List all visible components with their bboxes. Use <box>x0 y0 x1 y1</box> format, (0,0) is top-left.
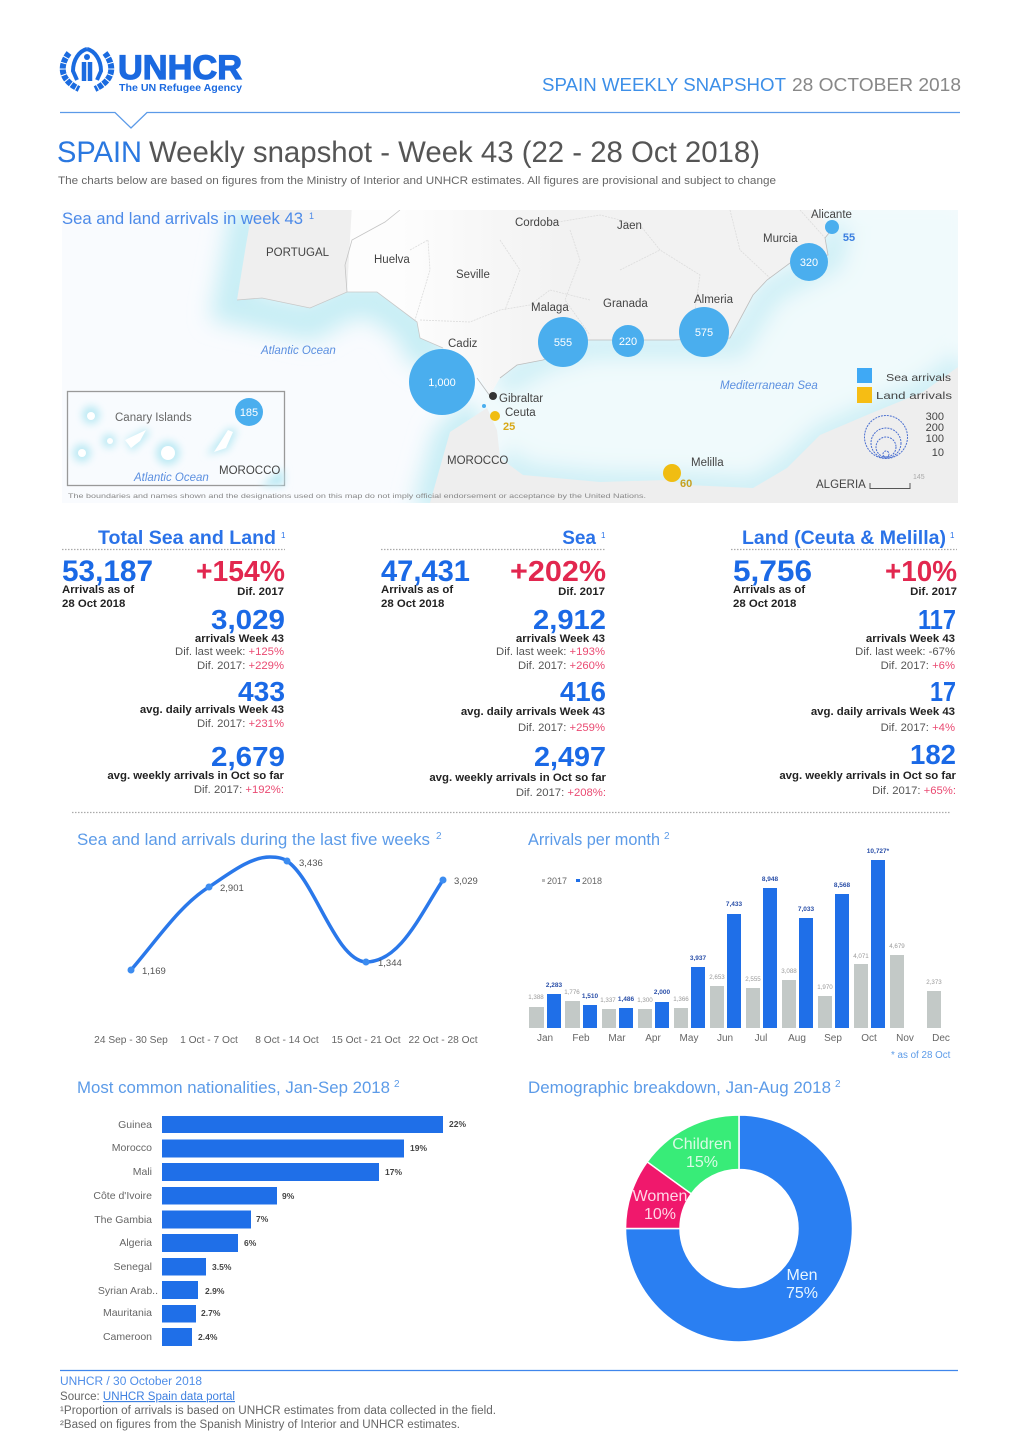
total difference: +202% <box>510 556 606 588</box>
circle values: 555 <box>554 337 572 349</box>
bars 2018 <box>547 860 885 1028</box>
country labels: Senegal <box>113 1261 152 1273</box>
map city labels: Seville <box>456 269 490 281</box>
total difference: +10% <box>885 556 957 588</box>
value labels 2017: 1,776 <box>564 989 580 996</box>
x axis labels: 1 Oct - 7 Oct <box>180 1035 238 1046</box>
value labels 2018: 10,727* <box>867 848 890 855</box>
dotted rule <box>62 548 285 550</box>
value labels 2017: 1,300 <box>637 997 653 1004</box>
map city labels: Gibraltar <box>499 393 543 405</box>
total label: 28 Oct 2018 <box>62 598 125 610</box>
value labels 2018: 2,000 <box>654 989 671 996</box>
circle values: 1,000 <box>428 377 456 389</box>
panel: land: Dif. 2017: +6% <box>881 660 955 672</box>
title: Weekly snapshot - Week 43 (22 - 28 Oct 2018) <box>149 136 760 169</box>
map sea labels <box>260 345 818 392</box>
panel: sea <box>381 528 607 799</box>
country labels: Guinea <box>118 1119 152 1131</box>
x axis labels <box>94 1035 478 1046</box>
month labels: Dec <box>932 1033 950 1044</box>
panel: sea: avg. daily arrivals Week 43 <box>461 706 605 718</box>
inset: Canary Islands <box>68 392 284 486</box>
value labels 2017: 3,088 <box>781 968 797 975</box>
footnote mark: 2 <box>394 1079 400 1090</box>
month labels <box>537 1033 950 1044</box>
map disclaimer: The boundaries and names shown and the designations used on this map do not imply official endorsement or acceptance by the United Nations. <box>68 494 646 500</box>
month labels: Jan <box>537 1033 553 1044</box>
circle values <box>428 232 855 389</box>
month labels: Oct <box>861 1033 877 1044</box>
value labels 2017: 1,388 <box>528 994 544 1001</box>
map legend: 100 <box>926 433 944 445</box>
panel: land: Dif. 2017: +65%: <box>872 785 956 797</box>
footnote 1: ¹Proportion of arrivals is based on UNHCR estimates from data collected in the field. <box>60 1405 496 1417</box>
chart title: Most common nationalities, Jan-Sep 2018 <box>77 1079 390 1097</box>
daily arrivals: 433 <box>238 676 285 707</box>
map city labels: Huelva <box>374 254 410 266</box>
panel: total sea and land: Dif. 2017: +229% <box>197 660 284 672</box>
land: Spain <box>347 205 833 395</box>
total figure: 47,431 <box>381 555 470 588</box>
label: men: 75% <box>786 1285 818 1302</box>
month labels: Feb <box>572 1033 590 1044</box>
label: children: 15% <box>686 1154 718 1171</box>
value labels 2018: 3,937 <box>690 955 707 962</box>
value labels 2018: 8,948 <box>762 876 779 883</box>
inset labels: Canary Islands <box>115 412 192 424</box>
country labels: Mali <box>133 1166 152 1178</box>
legend: 2018 <box>582 876 602 886</box>
inset: Canary Islands: MOROCCO <box>219 465 280 477</box>
map city labels: Jaen <box>617 220 642 232</box>
trend line <box>131 857 443 970</box>
data labels: 2,901 <box>220 883 244 894</box>
month labels: Jul <box>755 1033 767 1044</box>
chart title: Arrivals per month <box>528 831 660 849</box>
panel: sea: Dif. last week: +193% <box>496 646 605 658</box>
total label: 28 Oct 2018 <box>381 598 444 610</box>
panel: total sea and land: Dif. 2017: +231% <box>197 718 284 730</box>
label: men: Men <box>786 1267 818 1284</box>
panel: total sea and land: avg. weekly arrivals in Oct so far <box>107 770 285 782</box>
month labels: Jun <box>717 1033 733 1044</box>
logo tagline: The UN Refugee Agency <box>119 82 242 94</box>
icon: UNHCR emblem <box>63 49 111 89</box>
panel: land: avg. weekly arrivals in Oct so far <box>779 770 957 782</box>
footnote mark: 1 <box>281 531 286 540</box>
map city labels <box>266 209 866 491</box>
value labels 2017: 4,679 <box>889 943 905 950</box>
heading: Sea <box>562 528 596 549</box>
dotted rule <box>731 548 957 550</box>
country labels: Côte d'Ivoire <box>93 1190 152 1202</box>
weekly arrivals: 2,912 <box>533 604 606 635</box>
footer date: UNHCR / 30 October 2018 <box>60 1376 202 1388</box>
data labels: 3,436 <box>299 858 323 869</box>
map city labels: Alicante <box>811 209 852 221</box>
month labels: May <box>680 1033 698 1044</box>
value labels 2018: 7,433 <box>726 901 743 908</box>
chart title: Demographic breakdown, Jan-Aug 2018 <box>528 1079 831 1097</box>
data labels: 3,029 <box>454 876 478 887</box>
value labels: 3.5% <box>212 1262 232 1272</box>
chart note: * as of 28 Oct <box>891 1050 951 1061</box>
value labels 2017: 1,337 <box>600 997 616 1004</box>
panel: total sea and land: avg. daily arrivals Week 43 <box>140 704 284 716</box>
panel: land: Dif. last week: -67% <box>855 646 955 658</box>
label: women: Women <box>633 1188 687 1205</box>
map city labels: MOROCCO <box>447 455 508 467</box>
subtitle: The charts below are based on figures from the Ministry of Interior and UNHCR estimates. All figures are provisional and subject to change <box>58 175 776 187</box>
dotted rule <box>381 548 606 550</box>
panel: land: Dif. 2017: +4% <box>881 722 955 734</box>
panel: total sea and land: Dif. last week: +125% <box>175 646 284 658</box>
map city labels: PORTUGAL <box>266 247 330 259</box>
month labels: Nov <box>896 1033 914 1044</box>
heading: Total Sea and Land <box>98 528 276 549</box>
total figure: 53,187 <box>62 555 153 588</box>
inset island glow <box>73 406 284 486</box>
data points <box>128 858 446 974</box>
value labels 2017: 1,970 <box>817 984 833 991</box>
map city labels: Cadiz <box>448 338 478 350</box>
total figure: 5,756 <box>733 555 812 588</box>
map city labels: ALGERIA <box>816 479 866 491</box>
panel: land: arrivals Week 43 <box>866 633 955 645</box>
title: SPAIN <box>57 136 142 169</box>
country labels: The Gambia <box>94 1214 152 1226</box>
panel: land <box>731 528 957 797</box>
map sea labels: Atlantic Ocean <box>260 345 336 357</box>
segment: men <box>626 1115 852 1342</box>
label: children: Children <box>672 1136 732 1153</box>
map city labels: Almeria <box>694 294 734 306</box>
map scale bar: 145 <box>913 474 925 481</box>
segment: children <box>647 1115 739 1194</box>
country labels: Morocco <box>112 1142 152 1154</box>
panel: total sea and land: Dif. 2017 <box>237 586 284 598</box>
panel: sea: Dif. 2017: +259% <box>518 722 605 734</box>
panel: land: Dif. 2017 <box>910 586 957 598</box>
legend: 2017 <box>547 876 567 886</box>
value labels: 2.7% <box>201 1308 221 1318</box>
segment: women <box>626 1162 691 1228</box>
panel: demographic breakdown donut <box>528 1079 852 1342</box>
x axis labels: 8 Oct - 14 Oct <box>255 1035 319 1046</box>
markers: land arrivals: 60 <box>680 478 692 490</box>
value labels 2018 <box>546 848 890 1003</box>
footnote 2: ²Based on figures from the Spanish Ministry of Interior and UNHCR estimates. <box>60 1419 460 1431</box>
weekly arrivals: 3,029 <box>211 604 285 635</box>
value labels <box>198 1119 466 1342</box>
map background <box>196 210 958 503</box>
panel: arrivals per month <box>528 831 951 1061</box>
panel: line chart of last five weeks <box>77 831 478 1046</box>
map legend: 10 <box>932 447 944 459</box>
x axis labels: 22 Oct - 28 Oct <box>408 1035 478 1046</box>
country labels <box>93 1119 158 1343</box>
land: Portugal <box>237 205 352 308</box>
footnote mark: 2 <box>835 1079 841 1090</box>
circle values: 575 <box>695 327 713 339</box>
value labels: 7% <box>256 1214 269 1224</box>
value labels 2018: 1,486 <box>618 996 635 1003</box>
total label: Arrivals as of <box>733 584 805 596</box>
panel: total sea and land: Dif. 2017: +192%: <box>194 784 284 796</box>
weekly arrivals: 117 <box>918 604 956 635</box>
value labels: 9% <box>282 1191 295 1201</box>
map sea labels: Mediterranean Sea <box>720 380 818 392</box>
inset frame <box>68 392 284 486</box>
icon: Gibraltar marker <box>489 392 497 400</box>
value labels 2017: 1,366 <box>673 996 689 1003</box>
land: Morocco and Algeria <box>428 362 965 510</box>
value labels 2018: 1,510 <box>582 993 599 1000</box>
value labels 2018: 8,568 <box>834 882 851 889</box>
month labels: Apr <box>645 1033 661 1044</box>
label: women: 10% <box>644 1206 676 1223</box>
value labels: 22% <box>449 1119 466 1129</box>
markers: land arrivals: 25 <box>503 421 515 433</box>
inset: Canary Islands: Atlantic Ocean <box>133 472 209 484</box>
map city labels: Granada <box>603 298 648 310</box>
value labels 2017: 2,555 <box>745 976 761 983</box>
markers: land arrivals <box>490 411 692 490</box>
logo: UNHCR <box>63 49 242 94</box>
map title: Sea and land arrivals in week 43 <box>62 210 303 228</box>
data labels <box>142 858 478 977</box>
map city labels: Cordoba <box>515 217 560 229</box>
value labels: 17% <box>385 1167 402 1177</box>
panel: total sea and land <box>62 528 286 796</box>
footnote mark: 2 <box>664 831 670 842</box>
panel: sea: avg. weekly arrivals in Oct so far <box>429 772 607 784</box>
map city labels: Malaga <box>531 302 569 314</box>
panel: nationalities bar chart <box>77 1079 466 1346</box>
data labels: 1,169 <box>142 966 166 977</box>
footnote mark: 1 <box>950 531 955 540</box>
map legend: Sea arrivals <box>886 372 951 384</box>
panel: sea: arrivals Week 43 <box>516 633 605 645</box>
heading: Land (Ceuta & Melilla) <box>742 528 946 549</box>
country labels: Mauritania <box>103 1307 152 1319</box>
chart title: Sea and land arrivals during the last five weeks <box>77 831 430 849</box>
country labels: Cameroon <box>103 1331 152 1343</box>
panel: sea: Dif. 2017: +260% <box>518 660 605 672</box>
panel: total sea and land: arrivals Week 43 <box>195 633 284 645</box>
inset: Canary Islands: 185 <box>240 407 258 419</box>
circles: sea arrivals <box>409 220 839 415</box>
province borders <box>410 210 825 338</box>
map legend <box>857 368 952 459</box>
month labels: Sep <box>824 1033 842 1044</box>
data labels: 1,344 <box>378 958 402 969</box>
inset islands <box>78 412 233 460</box>
bars <box>162 1116 443 1346</box>
map city labels: Ceuta <box>505 407 536 419</box>
value labels: 6% <box>244 1238 257 1248</box>
circle values: 55 <box>843 232 855 244</box>
total label: Arrivals as of <box>381 584 453 596</box>
legend <box>542 876 602 886</box>
logo wordmark: UNHCR <box>118 49 242 87</box>
weekly average: 182 <box>910 739 956 770</box>
footnote mark: 2 <box>436 831 442 842</box>
map title: 1 <box>309 211 314 221</box>
inset arrival circle <box>235 398 263 426</box>
map scale bar <box>870 474 925 488</box>
country labels: Algeria <box>119 1237 152 1249</box>
value labels 2018: 7,033 <box>798 906 815 913</box>
header divider with notch <box>60 112 960 128</box>
total difference: +154% <box>196 556 285 588</box>
value labels 2017: 2,653 <box>709 974 725 981</box>
value labels: 2.9% <box>205 1286 225 1296</box>
panel: sea: Dif. 2017: +208%: <box>516 787 606 799</box>
value labels 2017: 2,373 <box>926 979 942 986</box>
footnote mark: 1 <box>601 531 606 540</box>
value labels: 2.4% <box>198 1332 218 1342</box>
map city labels: Murcia <box>763 233 798 245</box>
country labels: Syrian Arab.. <box>98 1285 158 1297</box>
total label: Arrivals as of <box>62 584 134 596</box>
panel: sea: Dif. 2017 <box>558 586 605 598</box>
daily arrivals: 17 <box>930 676 956 707</box>
value labels 2017 <box>528 943 942 1004</box>
header: report label: 28 OCTOBER 2018 <box>792 74 961 95</box>
bars 2017 <box>529 955 941 1028</box>
value labels 2017: 4,071 <box>853 953 869 960</box>
circle values: 220 <box>619 336 637 348</box>
x axis labels: 15 Oct - 21 Oct <box>331 1035 401 1046</box>
weekly average: 2,497 <box>534 741 606 772</box>
weekly average: 2,679 <box>211 741 285 772</box>
month labels: Mar <box>608 1033 626 1044</box>
map legend: Land arrivals <box>876 390 952 402</box>
footer source: Source: UNHCR Spain data portal <box>60 1391 235 1403</box>
map legend: 200 <box>926 422 944 434</box>
header: report label <box>542 74 961 95</box>
footer <box>60 1370 958 1431</box>
header: report label: SPAIN WEEKLY SNAPSHOT <box>542 74 786 95</box>
value labels 2018: 2,283 <box>546 982 563 989</box>
map legend: 300 <box>926 411 944 423</box>
panel: land: avg. daily arrivals Week 43 <box>811 706 955 718</box>
value labels: 19% <box>410 1143 427 1153</box>
panel: map of sea and land arrivals <box>62 200 970 510</box>
circle values: 320 <box>800 257 818 269</box>
x axis labels: 24 Sep - 30 Sep <box>94 1035 168 1046</box>
month labels: Aug <box>788 1033 806 1044</box>
daily arrivals: 416 <box>560 676 606 707</box>
map city labels: Melilla <box>691 457 724 469</box>
total label: 28 Oct 2018 <box>733 598 796 610</box>
